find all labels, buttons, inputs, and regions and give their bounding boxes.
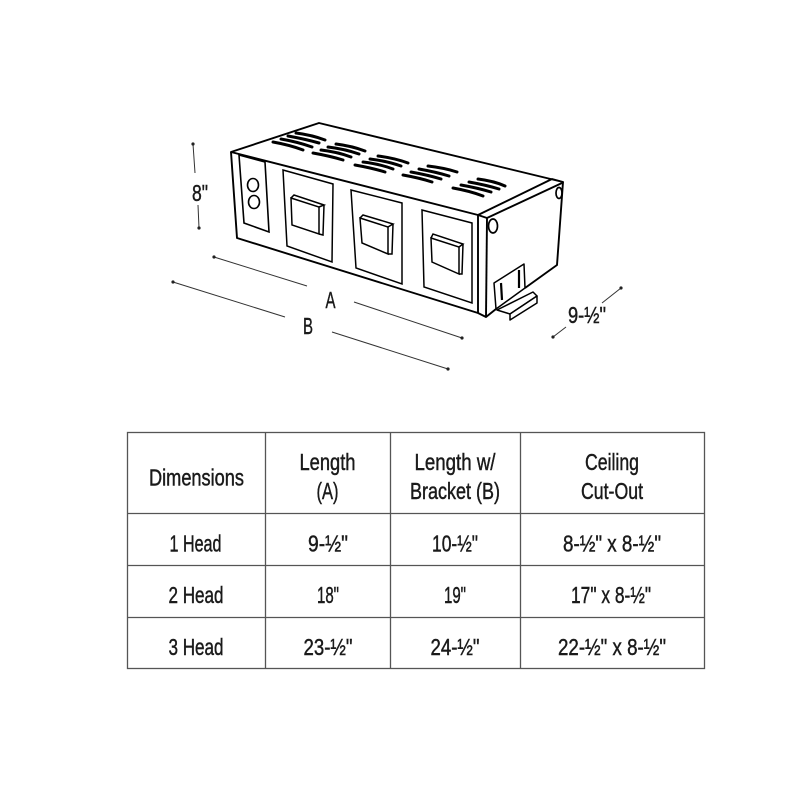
row: 3 head: 3 Head: [168, 634, 224, 660]
dimensions table: [128, 432, 704, 668]
dimension: B: B: [303, 313, 313, 339]
dimension: A: A: [326, 287, 336, 313]
row: 2 head: 18": [317, 582, 339, 608]
dimension: B: [171, 280, 450, 371]
row: 2 head: 17" x 8-½": [571, 582, 651, 608]
front panel 2: [351, 190, 402, 284]
row: 2 head: 19": [444, 582, 466, 608]
header row: Bracket (B): [410, 478, 500, 504]
row: 3 head: 24-½": [430, 634, 480, 660]
product diagram: [231, 123, 563, 320]
header row: [149, 449, 643, 504]
dimension: 9-1/2 inch: [551, 286, 623, 339]
dimension: 8 inch: 8": [192, 180, 208, 206]
header row: Dimensions: [149, 464, 244, 490]
header row: Ceiling: [585, 449, 639, 475]
header row: (A): [316, 478, 338, 504]
side outlet and bracket: [494, 264, 537, 320]
row: 2 head: [168, 582, 651, 608]
row: 1 head: [170, 530, 661, 556]
dimension: 9-1/2 inch: 9-½": [568, 302, 606, 328]
top vents: [273, 133, 505, 196]
header row: Length: [300, 449, 356, 475]
table grid: [128, 432, 704, 668]
header row: Cut-Out: [581, 478, 643, 504]
row: 2 head: 2 Head: [168, 582, 224, 608]
front panel 3: [422, 210, 472, 303]
header row: Length w/: [414, 449, 496, 475]
row: 3 head: [168, 634, 666, 660]
row: 1 head: 8-½" x 8-½": [563, 530, 661, 556]
box outline: [231, 123, 563, 317]
dimension: 8 inch: [191, 142, 208, 230]
front panel 1: [283, 170, 333, 262]
dimension: A: [212, 255, 464, 340]
row: 1 head: 1 Head: [170, 530, 222, 556]
row: 1 head: 10-½": [432, 530, 478, 556]
side holes: [488, 188, 562, 233]
row: 3 head: 22-½" x 8-½": [558, 634, 666, 660]
row: 3 head: 23-½": [304, 634, 352, 660]
row: 1 head: 9-½": [308, 530, 348, 556]
left panel with two circles: [239, 155, 269, 232]
